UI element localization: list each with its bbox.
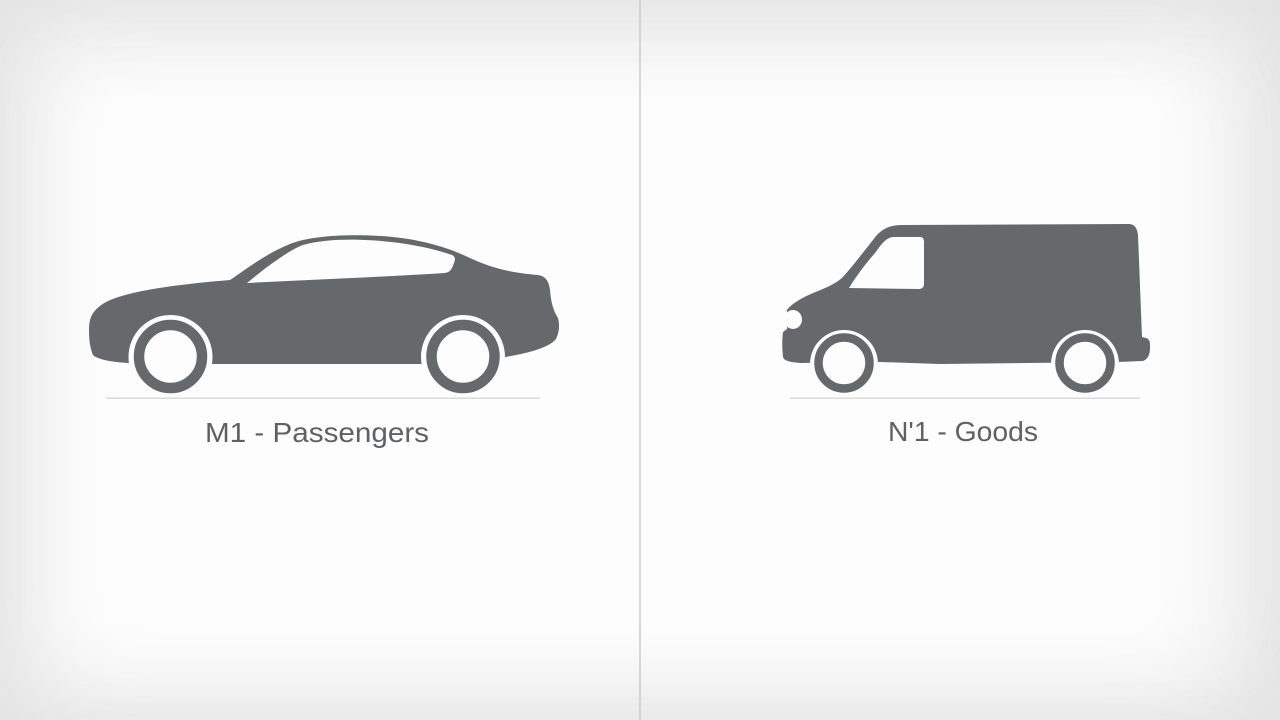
front wheel (139, 325, 202, 388)
window (247, 240, 455, 283)
headlight (784, 310, 802, 329)
rear wheel (432, 325, 494, 388)
ground line (790, 398, 1140, 399)
label: N1: N'1 - Goods (888, 416, 1038, 447)
window (849, 237, 924, 289)
panel: N1 goods van (782, 224, 1150, 447)
label: M1: M1 - Passengers (205, 417, 429, 448)
icon: van silhouette (782, 224, 1150, 398)
wheel arches (810, 330, 1119, 363)
rear wheel (1060, 338, 1110, 388)
panel: M1 passenger car (89, 235, 559, 448)
center divider (639, 0, 641, 720)
icon: passenger car silhouette (89, 235, 559, 399)
ground line (106, 398, 540, 399)
front wheel (818, 338, 870, 388)
wheel arches (128, 315, 505, 364)
